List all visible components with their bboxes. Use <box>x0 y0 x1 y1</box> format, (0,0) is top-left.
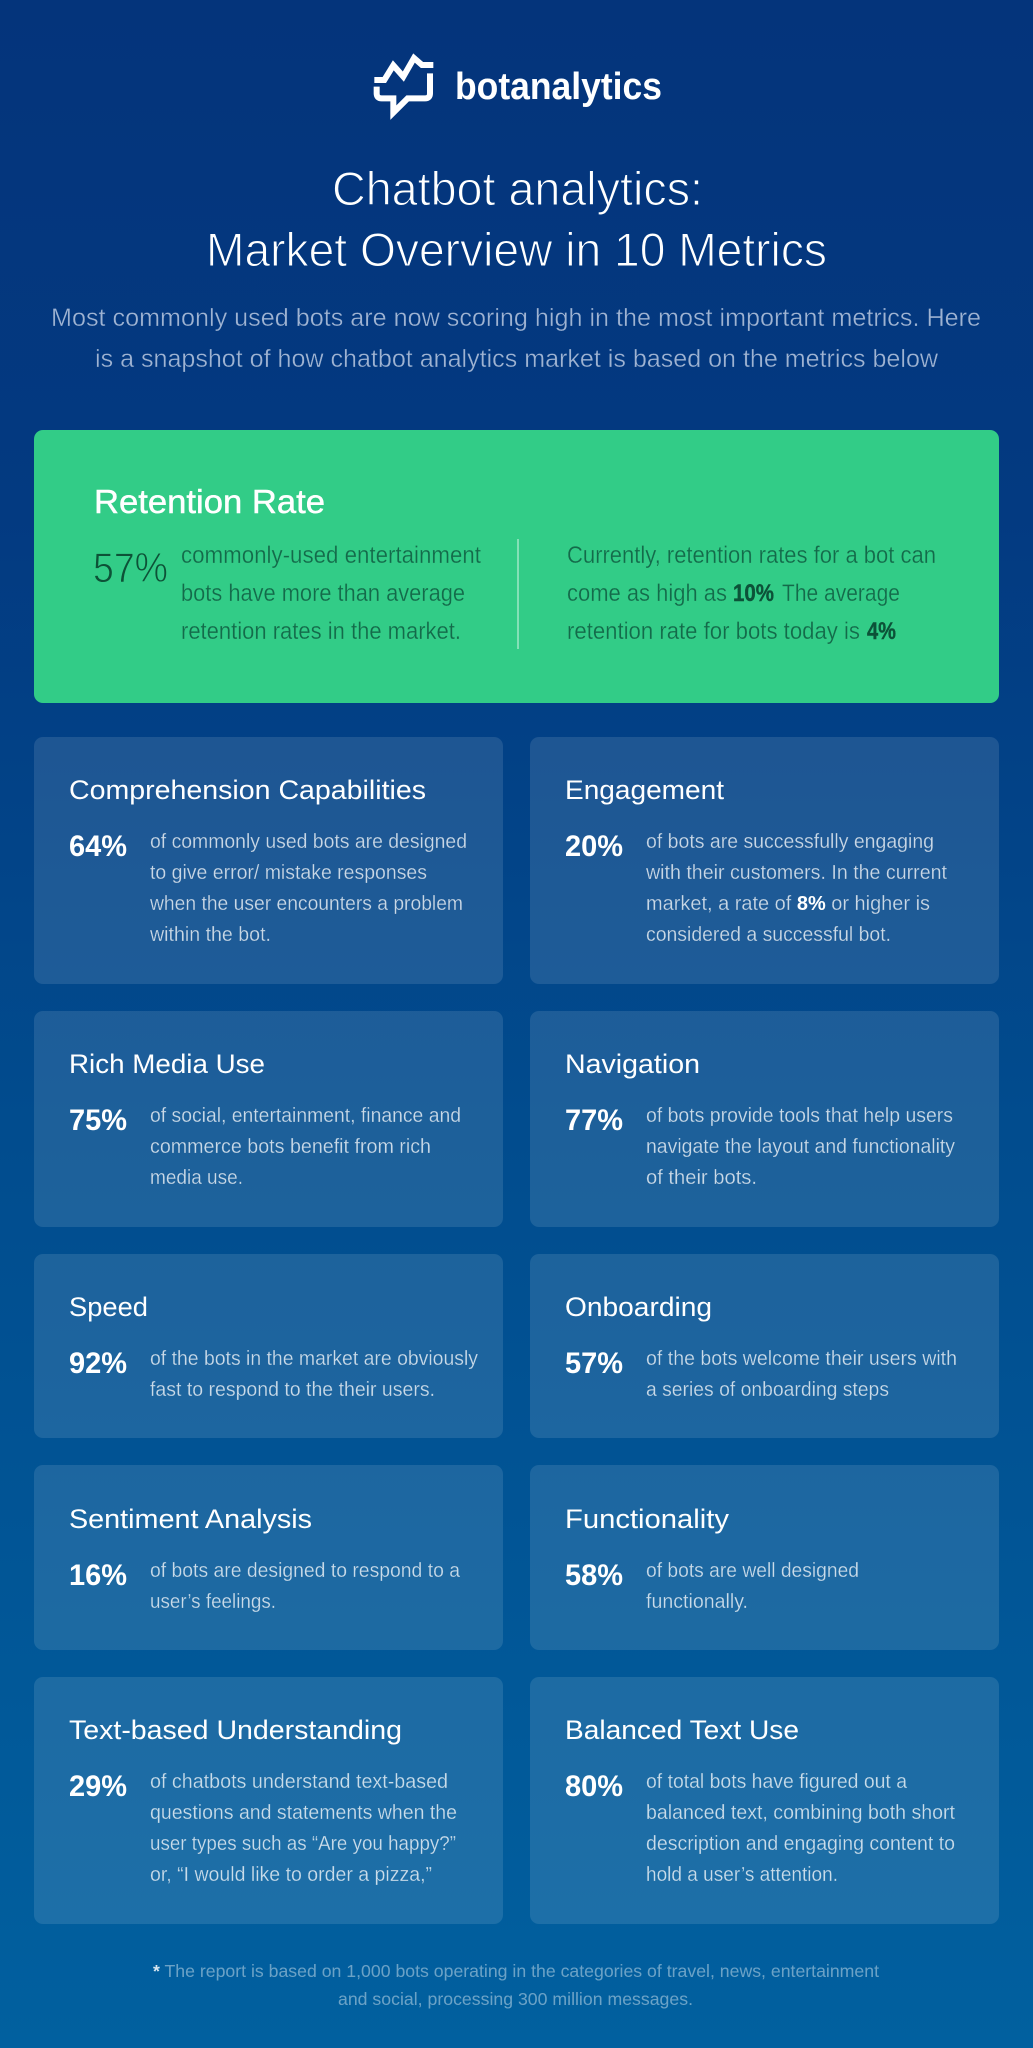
stat: 57%: 57% <box>93 544 168 591</box>
text: left retention note: commonly-used entertainment <box>181 542 481 569</box>
footnote <box>153 1961 879 2009</box>
body text: navigate the layout and functionality <box>646 1136 955 1158</box>
body text <box>645 831 947 946</box>
stat: 75%: 75% <box>69 1104 127 1137</box>
panel: text-based understanding <box>34 1677 503 1924</box>
panel: balanced text use <box>530 1677 999 1924</box>
heading: Rich Media Use <box>69 1049 265 1079</box>
body text: or, “I would like to order a pizza,” <box>150 1864 432 1886</box>
body text <box>150 1560 461 1613</box>
footnote: and social, processing 300 million messages. <box>338 1989 693 2009</box>
panel: speed <box>34 1254 503 1438</box>
body text: of social, entertainment, finance and <box>150 1105 461 1127</box>
panel: engagement <box>530 737 999 984</box>
panel: comprehension capabilities <box>34 737 503 984</box>
stat: 29%: 29% <box>69 1770 127 1803</box>
stat: 57%: 57% <box>565 1347 623 1380</box>
title <box>206 162 827 276</box>
subtitle: is a snapshot of how chatbot analytics market is based on the metrics below <box>95 345 939 373</box>
heading: Functionality <box>565 1504 730 1534</box>
body text: of bots are well designed <box>646 1560 859 1582</box>
stat: 58%: 58% <box>565 1559 623 1592</box>
body text <box>646 1105 955 1189</box>
body text: of total bots have figured out a <box>646 1771 908 1793</box>
body text: functionally. <box>646 1591 748 1613</box>
body text: fast to respond to the their users. <box>150 1379 435 1401</box>
text: right retention note: retention rate for bots today is <box>567 618 860 645</box>
body text: questions and statements when the <box>150 1802 457 1824</box>
body text: of bots provide tools that help users <box>646 1105 953 1127</box>
body text: of the bots welcome their users with <box>646 1348 957 1370</box>
heading: Comprehension Capabilities <box>69 775 426 805</box>
body text: hold a user’s attention. <box>646 1864 838 1886</box>
title: Chatbot analytics: <box>332 162 703 215</box>
heading: retention rate: Retention Rate <box>94 483 325 520</box>
body text: of bots are successfully engaging <box>646 831 934 853</box>
text: right retention note: Currently, retention rates for a bot can <box>567 542 936 569</box>
body text: media use. <box>150 1167 243 1189</box>
body text: of chatbots understand text-based <box>150 1771 448 1793</box>
panel: sentiment analysis <box>34 1465 503 1650</box>
logo <box>374 58 662 113</box>
text: right retention note <box>567 542 936 645</box>
body text <box>646 1771 955 1886</box>
body text: user types such as “Are you happy?” <box>150 1833 456 1855</box>
heading: Navigation <box>565 1049 700 1079</box>
body text: user’s feelings. <box>150 1591 276 1613</box>
heading: Engagement <box>565 775 725 805</box>
body text: commerce bots benefit from rich <box>150 1136 431 1158</box>
panel: functionality <box>530 1465 999 1650</box>
text: right retention note: 4% <box>867 618 896 645</box>
body text: of their bots. <box>646 1167 757 1189</box>
body text: considered a successful bot. <box>646 924 891 946</box>
title: Market Overview in 10 Metrics <box>206 223 827 276</box>
text: left retention note <box>181 542 481 645</box>
heading: Text-based Understanding <box>69 1715 402 1745</box>
body text: description and engaging content to <box>646 1833 955 1855</box>
stat: 20%: 20% <box>565 830 623 863</box>
stat: 77%: 77% <box>565 1104 623 1137</box>
stat: 92%: 92% <box>69 1347 127 1380</box>
body text <box>150 1105 461 1189</box>
body text: of commonly used bots are designed <box>150 831 467 853</box>
body text: within the bot. <box>149 924 271 946</box>
panel: navigation <box>530 1011 999 1227</box>
footnote: * The report is based on 1,000 bots operating in the categories of travel, news, entertainment <box>153 1961 879 1981</box>
text: right retention note: come as high as <box>567 580 727 607</box>
body text: of the bots in the market are obviously <box>150 1348 478 1370</box>
panel: retention rate <box>34 430 999 703</box>
body text <box>150 1771 457 1886</box>
body text <box>149 831 467 946</box>
body text <box>646 1560 859 1613</box>
body text <box>646 1348 957 1401</box>
subtitle: Most commonly used bots are now scoring high in the most important metrics. Here <box>51 304 981 332</box>
text: right retention note: The average <box>782 580 900 607</box>
wordmark: botanalytics <box>455 66 662 108</box>
body text: with their customers. In the current <box>645 862 947 884</box>
body text: to give error/ mistake responses <box>150 862 427 884</box>
heading: Sentiment Analysis <box>69 1504 312 1534</box>
subtitle <box>51 304 981 373</box>
panel: onboarding <box>530 1254 999 1438</box>
stat: 64%: 64% <box>69 830 127 863</box>
body text: when the user encounters a problem <box>149 893 463 915</box>
stat: 80%: 80% <box>565 1770 623 1803</box>
stat: 16%: 16% <box>69 1559 127 1592</box>
text: left retention note: retention rates in the market. <box>181 618 461 645</box>
body text: balanced text, combining both short <box>646 1802 955 1824</box>
heading: Speed <box>69 1292 148 1322</box>
body text: of bots are designed to respond to a <box>150 1560 461 1582</box>
body text: a series of onboarding steps <box>646 1379 889 1401</box>
text: right retention note: 10% <box>733 580 774 607</box>
body text <box>150 1348 478 1401</box>
heading: Balanced Text Use <box>565 1715 799 1745</box>
icon: chat bubble with chart line <box>374 58 433 113</box>
heading: Onboarding <box>565 1292 712 1322</box>
panel: rich media use <box>34 1011 503 1227</box>
text: left retention note: bots have more than average <box>181 580 465 607</box>
body text: market, a rate of 8% or higher is <box>646 893 930 915</box>
